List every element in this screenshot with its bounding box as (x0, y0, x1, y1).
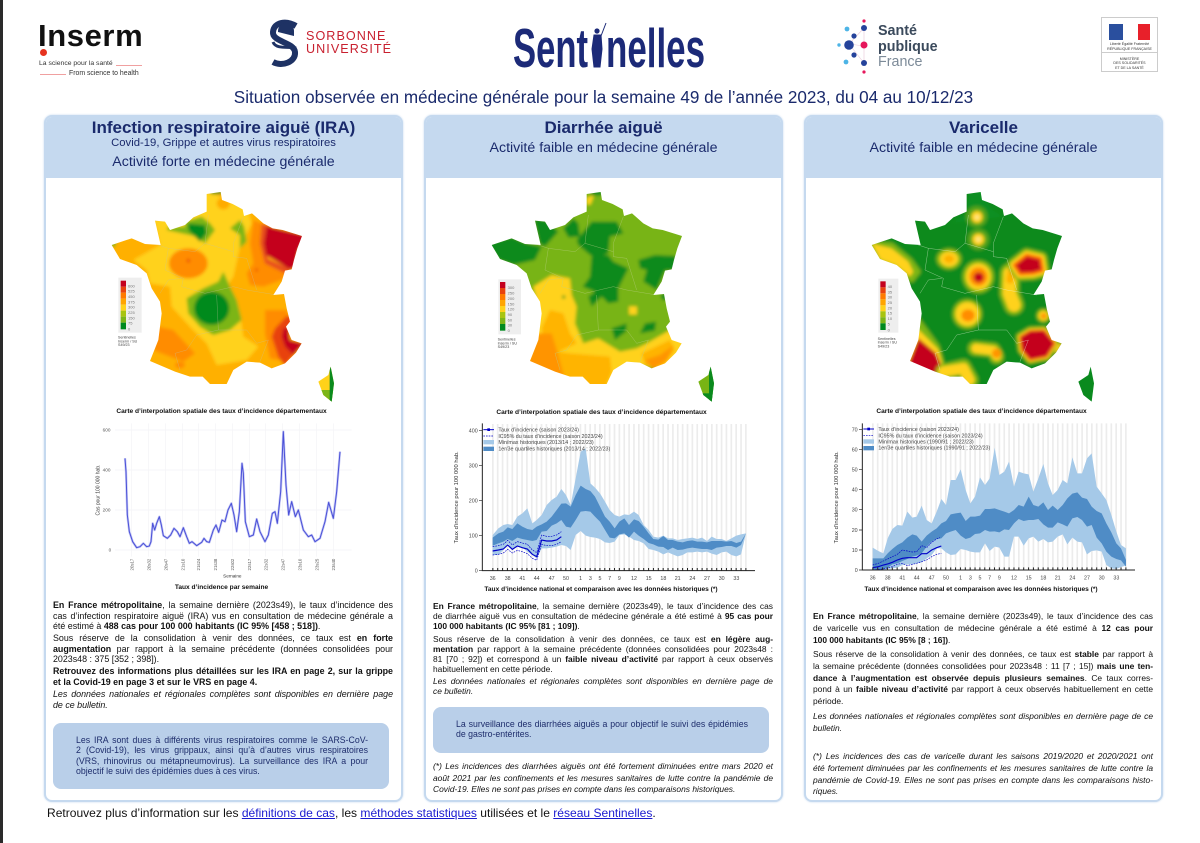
chart: IRA weekly rate (96, 424, 352, 579)
chart: Varicelle: 40 (852, 488, 858, 494)
header: Varicelle (806, 117, 1161, 178)
chart caption: Diarrhée: Taux d’incidence national et comparaison avec les données historiques (*) (484, 586, 718, 593)
legend: Sentinelles (498, 338, 516, 342)
logo: Ministère (1101, 17, 1158, 72)
text: IRA summary: En France métropolitaine, la semaine dernière (2023s49), le taux d’incidence des (53, 600, 393, 610)
text: IRA summary: et la Covid-19 en page 3 et sur le VRS en page 4. (53, 676, 257, 686)
header: Varicelle: Varicelle (949, 118, 1018, 137)
chart: Varicelle: Taux d’incidence pour 100 000 hab. (834, 451, 840, 543)
text: Varicelle summary: En France métropolitaine, la semaine dernière (2023s49), le taux d’incidence des cas (813, 611, 1153, 621)
main title: Situation observée en médecine générale pour la semaine 49 de l’année 2023, du 04 au 10/12/23 (234, 88, 973, 107)
chart: IRA weekly rate: Cas pour 100 000 hab. (96, 465, 102, 515)
chart: Varicelle: 1 (959, 575, 962, 581)
logo: Sentinelles: Sent (513, 17, 588, 79)
chart: IRA weekly rate: Semaine (223, 574, 242, 579)
chart: Varicelle (834, 423, 1135, 581)
Corse (1078, 366, 1094, 402)
text: Diarrhée summary (433, 601, 773, 696)
chart legend: Min/max historiques (1990/91 ; 2022/23) (878, 439, 974, 445)
text: Diarrhée summary: ce bulletin. (433, 686, 473, 696)
chart: Diarrhée: 7 (608, 576, 611, 582)
text: Varicelle summary: de varicelle vus en consultation de médecine générale a été estimé à 12 cas pour (813, 623, 1153, 633)
callout: Diarrhée: La surveillance des diarrhées aiguës a pour objectif le suivi des épidémies (456, 719, 748, 729)
logo: Santé publique France: France (878, 54, 922, 70)
legend: 90 (508, 312, 513, 317)
legend: 120 (508, 307, 515, 312)
chart: Varicelle: 36 (870, 575, 876, 581)
legend (118, 278, 142, 347)
chart legend: Min/max historiques (2013/14 ; 2022/23) (498, 440, 594, 446)
chart: IRA weekly rate: 21s24 (196, 558, 201, 570)
chart: Varicelle: 33 (1113, 575, 1119, 581)
chart: IRA weekly rate: 20s17 (129, 558, 134, 570)
chart legend (863, 427, 991, 452)
legend: 25 (888, 300, 893, 305)
header: IRA (46, 117, 401, 178)
footnote: Varicelle: riques. (813, 786, 838, 796)
chart: IRA weekly rate: 0 (109, 548, 112, 553)
chart: IRA weekly rate: 23s10 (297, 558, 302, 570)
header: Varicelle: Activité faible en médecine générale (870, 140, 1097, 156)
legend: 200 (508, 296, 515, 301)
chart: Diarrhée: 1 (579, 576, 582, 582)
map caption: Diarrhée: Carte d’interpolation spatiale des taux d’incidence départementaux (496, 409, 707, 416)
chart: Varicelle: 9 (998, 575, 1001, 581)
panel: Diarrhée aiguë (424, 115, 783, 802)
chart: IRA weekly rate: 22s02 (230, 558, 235, 570)
chart: Diarrhée: 44 (534, 576, 540, 582)
chart: Diarrhée (454, 423, 755, 582)
legend: 10 (888, 316, 893, 321)
legend: Inserm / SU (878, 341, 897, 345)
chart: IRA weekly rate: 20s47 (163, 558, 168, 570)
legend (878, 279, 898, 348)
legend: Inserm / SU (498, 341, 517, 345)
callout: IRA: (VRS, rhinovirus ou métapneumovirus). La surveillance des IRA a pour (76, 756, 368, 766)
chart: Diarrhée: 0 (475, 569, 478, 575)
footnote: Diarrhée (433, 761, 774, 794)
legend: 40 (888, 284, 893, 289)
chart: IRA weekly rate: 200 (103, 508, 111, 513)
chart: Diarrhée: 24 (689, 576, 695, 582)
chart legend: IC95% du taux d’incidence (saison 2023/24) (498, 434, 603, 440)
logo: Sorbonne Université: SORBONNE (306, 29, 386, 43)
footnote: Varicelle: pandémie de Covid-19. Elles ne sont pas prises en compte dans les comparaisons histo- (813, 775, 1153, 785)
legend: 60 (508, 317, 513, 322)
map: IRA (112, 192, 334, 402)
chart caption: Varicelle: Taux d’incidence national et comparaison avec les données historiques (*) (864, 586, 1098, 593)
text: Diarrhée summary: habituellement en cette période. (433, 664, 553, 674)
text: Varicelle summary: dance à l’augmentation est observée depuis plusieurs semaines. Ce taux corres- (813, 673, 1153, 683)
chart: IRA weekly rate: 22s47 (280, 558, 285, 570)
chart: Varicelle: 5 (979, 575, 982, 581)
chart: Diarrhée: 5 (599, 576, 602, 582)
header: IRA: Activité forte en médecine générale (112, 154, 335, 170)
footnote: Varicelle: été fortement diminuées par les confinements et les mesures sanitaires de lutte contre la (813, 763, 1153, 773)
header: IRA: Covid-19, Grippe et autres virus respiratoires (111, 137, 336, 149)
chart legend: Taux d’incidence (saison 2023/24) (878, 427, 959, 433)
chart caption: IRA: Taux d’incidence par semaine (175, 584, 268, 591)
header: Diarrhée: Activité faible en médecine générale (490, 140, 717, 156)
logo: Ministère: Liberté Égalité Fraternité (1110, 42, 1149, 46)
text: IRA summary: été estimé à 488 cas pour 100 000 habitants (IC 95% [458 ; 518]). (53, 621, 320, 631)
text: Diarrhée summary: En France métropolitaine, la semaine dernière (2023s49), le taux d’incidence des cas (433, 601, 773, 611)
chart: Varicelle: 0 (855, 568, 858, 574)
chart: Diarrhée: 9 (618, 576, 621, 582)
callout: IRA: 2 (Covid-19), les virus grippaux, ainsi qu’à d’autres virus respiratoires (76, 745, 368, 755)
text: IRA summary: Les données nationales et régionales complètes sont disponibles en dernière page (53, 689, 393, 699)
callout: IRA (53, 723, 389, 789)
callout: IRA: objectif le suivi des épidémies dues à ces virus. (76, 766, 260, 776)
text: IRA summary: 2023s48 : 375 [352 ; 398]). (53, 654, 159, 664)
Corse (318, 366, 334, 402)
legend: S49/23 (498, 345, 509, 349)
legend: S49/23 (878, 344, 889, 348)
chart: IRA weekly rate: 600 (103, 428, 111, 433)
text: Varicelle summary: Sous réserve de la consolidation à venir des données, ce taux est stable par rapport à (813, 649, 1153, 659)
chart: IRA weekly rate: 400 (103, 468, 111, 473)
legend: 20 (888, 305, 893, 310)
chart: Varicelle: 30 (852, 508, 858, 514)
footnote: Varicelle: (*) Les incidences des cas de varicelle durant les saisons 2019/2020 et 2020/2021 ont (813, 751, 1153, 761)
text: Varicelle summary: Les données nationales et régionales complètes sont disponibles en dernière page de ce (813, 711, 1153, 721)
map: Diarrhée (492, 192, 714, 402)
legend: Sentinelles (878, 337, 896, 341)
text: IRA summary (53, 600, 393, 710)
left edge bar (0, 0, 3, 843)
legend: Sentinelles (118, 336, 136, 340)
chart: Diarrhée: 12 (631, 576, 637, 582)
chart: Diarrhée: 3 (589, 576, 592, 582)
chart: Varicelle: 24 (1069, 575, 1075, 581)
chart: Varicelle: 44 (914, 575, 920, 581)
logo: Sorbonne Université: UNIVERSITÉ (306, 42, 392, 56)
legend: 35 (888, 289, 893, 294)
chart: Varicelle: 20 (852, 528, 858, 534)
text: Diarrhée summary: 100 000 habitants (IC 95% [81 ; 109]). (433, 621, 580, 631)
chart legend: 1er/3e quartiles historiques (1990/91 ; 2022/23) (878, 446, 991, 452)
legend: 150 (508, 301, 515, 306)
text: Diarrhée summary: Sous réserve de la consolidation à venir des données, ce taux est en légère aug- (433, 634, 773, 644)
chart: Diarrhée: Taux d’incidence pour 100 000 hab. (454, 451, 460, 543)
header: Diarrhée: Diarrhée aiguë (544, 118, 663, 137)
logo: Sorbonne Université (270, 20, 392, 67)
text: Varicelle summary: pond à un faible niveau d’activité par rapport à ceux observés habituellement en cette (813, 684, 1153, 694)
text: IRA summary: Retrouvez des informations plus détaillées sur les IRA en page 2, sur la grippe (53, 666, 393, 676)
map caption: IRA: Carte d’interpolation spatiale des taux d’incidence départementaux (116, 408, 327, 415)
chart: Diarrhée: 47 (549, 576, 555, 582)
callout: Diarrhée (433, 707, 769, 753)
text: Varicelle summary: la semaine précédente (données consolidées pour 2023s48 : 11 [7 ; 15]) mais une ten- (813, 661, 1153, 671)
chart: Diarrhée: 300 (469, 463, 478, 469)
legend: 75 (128, 321, 133, 326)
chart legend: Taux d’incidence (saison 2023/24) (498, 428, 579, 434)
logo: Sentinelles: i (593, 17, 602, 79)
chart: Varicelle: 50 (943, 575, 949, 581)
legend: 0 (888, 327, 891, 332)
chart: IRA weekly rate: 22s17 (247, 558, 252, 570)
legend (498, 279, 521, 349)
chart: Varicelle: 50 (852, 468, 858, 474)
chart: Varicelle: 60 (852, 447, 858, 453)
text: Diarrhée summary: Les données nationales et régionales complètes sont disponibles en dernière page de (433, 676, 773, 686)
logo: Sentinelles (513, 17, 705, 79)
chart: Varicelle: 21 (1055, 575, 1061, 581)
panel: IRA (44, 115, 403, 802)
chart legend (483, 428, 611, 452)
legend: 450 (128, 294, 135, 299)
legend: Inserm / SU (118, 339, 138, 343)
chart: Varicelle: 10 (852, 548, 858, 554)
legend: 300 (508, 285, 515, 290)
text: Varicelle summary: période. (813, 696, 843, 706)
chart: Varicelle: 41 (899, 575, 905, 581)
chart: Varicelle: 7 (988, 575, 991, 581)
map caption: Varicelle: Carte d’interpolation spatiale des taux d’incidence départementaux (876, 408, 1087, 415)
chart: Diarrhée: 200 (469, 498, 478, 504)
chart: Varicelle: 12 (1011, 575, 1017, 581)
legend: 30 (888, 295, 893, 300)
text: IRA summary: Sous réserve de la consolidation à venir des données, ce taux est en forte (53, 633, 393, 643)
legend: 0 (508, 328, 511, 333)
chart: Varicelle: 70 (852, 427, 858, 433)
chart: Varicelle: 38 (885, 575, 891, 581)
axes (479, 423, 755, 571)
text: Diarrhée summary: mentation par rapport à la semaine précédente (données consolidées pour 2023s48 : (433, 644, 773, 654)
logo: Ministère: ET DE LA SANTÉ (1115, 66, 1144, 70)
chart: Diarrhée: 38 (505, 576, 511, 582)
legend: 525 (128, 289, 135, 294)
chart: Diarrhée: 50 (563, 576, 569, 582)
chart: Diarrhée: 27 (704, 576, 710, 582)
chart: Varicelle: 18 (1040, 575, 1046, 581)
footnote: Diarrhée: Covid-19. Elles ne sont pas prises en compte dans les comparaisons historiques. (433, 784, 735, 794)
callout: IRA: Les IRA sont dues à différents virus respiratoires comme le SARS-CoV- (76, 735, 368, 745)
legend: 15 (888, 311, 893, 316)
chart: Diarrhée: 400 (469, 428, 478, 434)
chart: Diarrhée: 21 (675, 576, 681, 582)
legend: 225 (128, 310, 135, 315)
chart: Varicelle: 30 (1099, 575, 1105, 581)
chart: IRA weekly rate: 21s38 (213, 558, 218, 570)
legend: 0 (128, 327, 131, 332)
chart legend: IC95% du taux d’incidence (saison 2023/24) (878, 433, 983, 439)
footnote: Varicelle (812, 751, 1154, 796)
logo: Santé publique France: publique (878, 38, 938, 54)
callout: Diarrhée: de gastro-entérites. (456, 729, 531, 739)
logo: Santé publique France (837, 19, 938, 74)
footer links: Retrouvez plus d’information sur les définitions de cas, les méthodes statistiques utilisées et le réseau Sentinelles. (47, 806, 656, 820)
legend: 30 (508, 323, 513, 328)
logo: Inserm: Inserm (38, 18, 143, 53)
text: Diarrhée summary: de diarrhée aiguë vus en consultation de médecine générale a été estimé à 95 cas pour (433, 611, 773, 621)
axes (859, 423, 1135, 570)
text: Varicelle summary: 100 000 habitants (IC 95% [8 ; 16]). (813, 635, 950, 645)
Corse (698, 366, 714, 402)
header: Diarrhée (426, 117, 781, 178)
logo: Ministère: DES SOLIDARITÉS (1113, 61, 1146, 65)
legend: 150 (128, 315, 135, 320)
chart: IRA weekly rate: 23s40 (331, 558, 336, 570)
legend: 300 (128, 305, 135, 310)
chart: Diarrhée: 100 (469, 533, 478, 539)
logo: Sentinelles: nelles (606, 17, 705, 79)
chart legend: 1er/3e quartiles historiques (2013/14 ; 2022/23) (498, 446, 611, 452)
text: IRA summary: augmentation par rapport à la semaine précédente (données consolidées pour (53, 644, 393, 654)
logo: Inserm: From science to health (69, 70, 139, 77)
text: Varicelle summary: bulletin. (813, 723, 842, 733)
chart: Diarrhée: 30 (719, 576, 725, 582)
chart: Varicelle: 3 (969, 575, 972, 581)
legend: 250 (508, 291, 515, 296)
chart: IRA weekly rate: 23s25 (314, 558, 319, 570)
logo: Inserm (38, 18, 143, 77)
chart: Varicelle: 27 (1084, 575, 1090, 581)
chart: Diarrhée: 15 (646, 576, 652, 582)
chart: IRA weekly rate: 20s32 (146, 558, 151, 570)
chart: Diarrhée: 36 (490, 576, 496, 582)
header: IRA: Infection respiratoire aiguë (IRA) (92, 118, 355, 137)
chart: Varicelle: 47 (929, 575, 935, 581)
legend: 375 (128, 299, 135, 304)
chart: Varicelle: 15 (1026, 575, 1032, 581)
logo: Santé publique France: Santé (878, 23, 917, 39)
chart: Diarrhée: 18 (660, 576, 666, 582)
logo: Ministère: RÉPUBLIQUE FRANÇAISE (1107, 46, 1152, 50)
panel: Varicelle (804, 115, 1163, 802)
logo: Inserm: La science pour la santé (39, 60, 113, 67)
chart: Diarrhée: 41 (519, 576, 525, 582)
text: Varicelle summary (813, 611, 1154, 733)
footnote: Diarrhée: août 2021 par les confinements et les mesures sanitaires de lutte contre la pandémie de (433, 773, 773, 783)
chart: IRA weekly rate: 21s10 (180, 558, 185, 570)
chart: IRA weekly rate: 22s32 (263, 558, 268, 570)
text: IRA summary: cas d’infection respiratoire aiguë (IRA) vus en consultation de médecine générale a (53, 610, 393, 620)
legend: 600 (128, 283, 135, 288)
legend: S49/23 (118, 343, 130, 347)
legend: 5 (888, 321, 891, 326)
map: Varicelle (872, 192, 1094, 402)
text: IRA summary: de ce bulletin. (53, 700, 108, 710)
chart: Diarrhée: 33 (733, 576, 739, 582)
logo: Ministère: MINISTÈRE (1120, 57, 1139, 61)
footnote: Diarrhée: (*) Les incidences des diarrhées aiguës ont été fortement diminuées entre mars 2020 et (433, 761, 773, 771)
region borders (158, 215, 277, 370)
text: Diarrhée summary: 81 [70 ; 92]) et correspond à un faible niveau d’activité par rapport à ceux observés (433, 654, 773, 664)
